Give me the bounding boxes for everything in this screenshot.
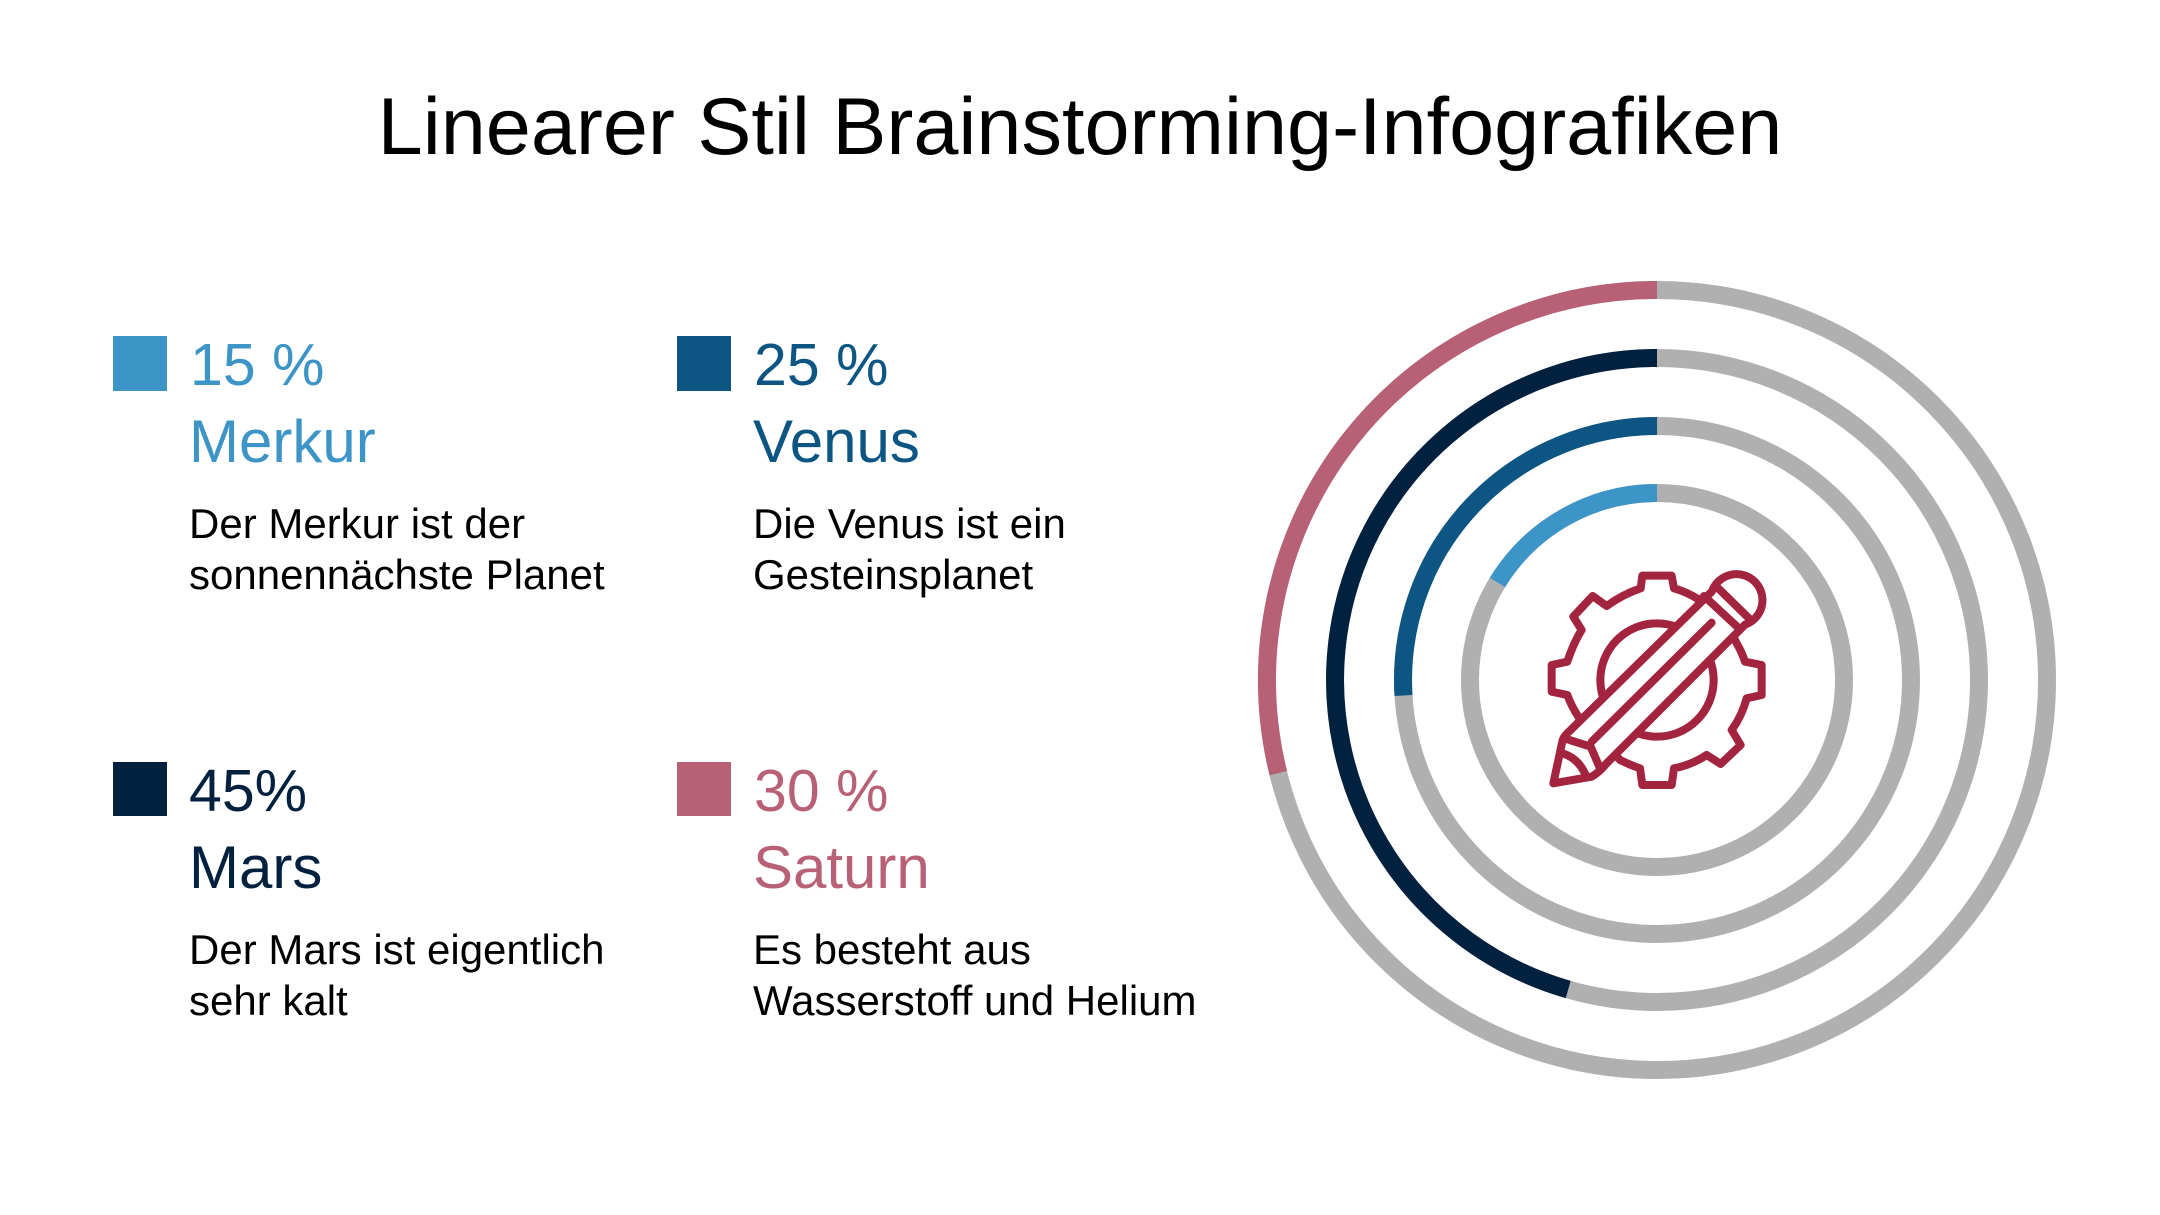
description: Saturn: Wasserstoff und Helium — [753, 977, 1197, 1024]
description: Mars: Der Mars ist eigentlich — [189, 926, 604, 973]
legend square: Venus — [677, 336, 731, 391]
value: 45%: 45% — [189, 758, 307, 824]
ring: Venus 25 % — [1403, 426, 1911, 934]
description: Venus: Die Venus ist ein — [753, 500, 1066, 547]
legend square: Saturn — [677, 762, 731, 816]
name: Mars: Mars — [189, 834, 322, 901]
pencil body — [1553, 574, 1762, 783]
ring: Mars 45 % — [1335, 358, 1979, 1002]
value: 15 %: 15 % — [190, 332, 324, 398]
description: Mars: sehr kalt — [189, 977, 348, 1024]
description: Saturn: Es besteht aus — [753, 926, 1031, 973]
name: Venus: Venus — [753, 408, 920, 475]
gear outline — [1552, 576, 1762, 785]
description: Venus: Gesteinsplanet — [753, 551, 1034, 598]
gear hub — [1600, 623, 1714, 737]
ring: Saturn 30 % — [1267, 290, 2047, 1070]
value: 30 %: 30 % — [754, 758, 888, 824]
legend square: Mars — [113, 762, 167, 816]
ring: Merkur 15 % — [1470, 493, 1844, 867]
panel: Merkur — [113, 332, 605, 598]
radial progress chart — [1267, 290, 2047, 1070]
description: Merkur: sonnennächste Planet — [189, 551, 605, 598]
name: Saturn: Saturn — [753, 834, 930, 901]
name: Merkur: Merkur — [189, 408, 376, 475]
panel: Venus — [677, 332, 1066, 598]
title: Linearer Stil Brainstorming-Infografiken — [378, 82, 1782, 172]
panel: Mars — [113, 758, 604, 1024]
value: 25 %: 25 % — [754, 332, 888, 398]
pencil details — [1560, 588, 1751, 776]
description: Merkur: Der Merkur ist der — [189, 500, 525, 547]
legend square: Merkur — [113, 336, 167, 391]
icon: gear and pencil — [1552, 574, 1762, 785]
panel: Saturn — [677, 758, 1197, 1024]
